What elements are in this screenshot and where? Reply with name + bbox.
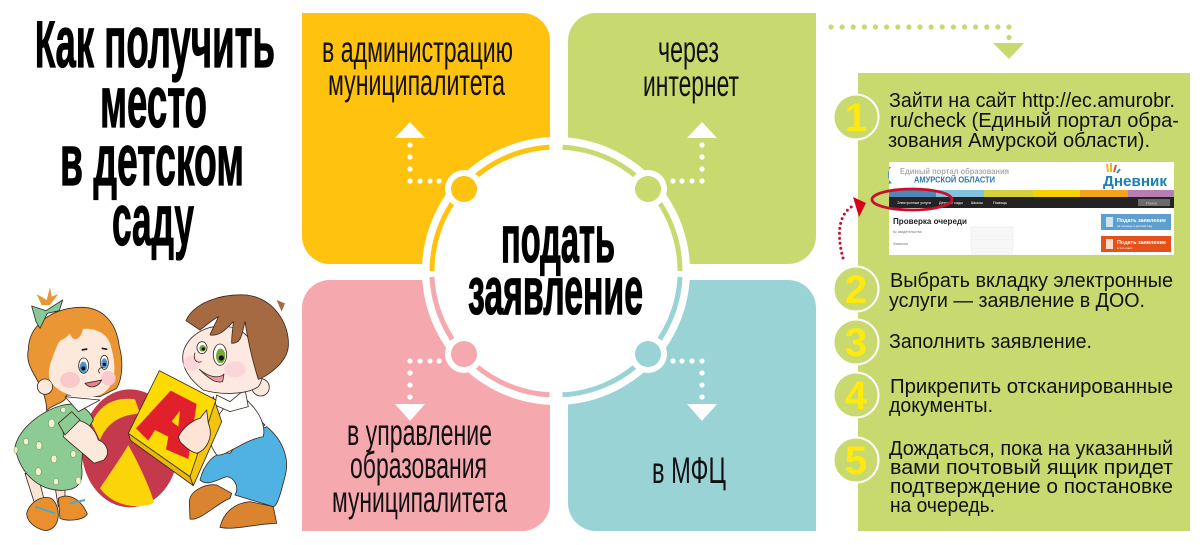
panel label: administration <box>322 29 513 103</box>
website screenshot: Поиск <box>1146 200 1157 206</box>
title: саду <box>112 181 194 261</box>
panel: education office <box>302 280 550 531</box>
red ellipse highlight <box>872 189 952 210</box>
step 2 <box>834 266 1173 312</box>
step 3: Заполнить заявление. <box>889 331 1092 353</box>
panel label: education office: в управление <box>347 412 492 453</box>
panel label: education office <box>332 412 507 520</box>
arrow: to internet <box>670 122 717 184</box>
panel: steps <box>834 73 1190 531</box>
step 1 <box>834 90 1179 152</box>
website screenshot: Дневник <box>1103 173 1167 190</box>
step 3 <box>834 320 1092 365</box>
arrow: dotted connector to steps panel <box>828 24 1024 59</box>
title: место <box>100 63 207 143</box>
panel label: MFC: в МФЦ <box>652 450 726 491</box>
boy <box>183 295 288 528</box>
ball <box>82 389 178 507</box>
step 4: документы. <box>889 395 993 417</box>
step 1: Зайти на сайт http://ec.amurobr. <box>889 90 1175 112</box>
arrow: to education office <box>395 358 442 421</box>
central heading: заявление <box>468 254 643 329</box>
panel label: education office: муниципалитета <box>332 479 507 520</box>
panel label: administration: муниципалитета <box>328 62 505 103</box>
step 5 <box>834 438 1173 517</box>
website screenshot: АМУРСКОЙ ОБЛАСТИ <box>914 176 995 184</box>
step 1: 1 <box>845 96 867 140</box>
website screenshot: Помощь <box>993 201 1007 205</box>
website screenshot: в 1-й класс <box>1117 246 1133 250</box>
central heading <box>468 202 643 329</box>
step 5: Дождаться, пока на указанный <box>889 438 1173 460</box>
arrow: to administration <box>395 122 442 184</box>
website screenshot: № свидетельства <box>893 230 922 234</box>
website screenshot: Школы <box>971 201 984 205</box>
central heading: подать <box>501 202 615 277</box>
step 2: 2 <box>845 268 867 312</box>
panel label: administration: в администрацию <box>322 29 513 70</box>
panel label: internet: интернет <box>643 63 739 104</box>
website screenshot: Подать заявление <box>1117 240 1166 246</box>
panel: internet <box>568 13 816 264</box>
panel label: internet <box>643 29 739 104</box>
girl <box>14 287 122 531</box>
website screenshot: Проверка очереди <box>893 216 967 226</box>
website screenshot: Фамилия <box>893 242 908 246</box>
boy's hand <box>178 410 210 453</box>
panel: administration <box>302 13 550 264</box>
step 5: вами почтовый ящик придет <box>890 457 1173 479</box>
step 5: 5 <box>845 439 867 483</box>
letter block <box>128 371 222 486</box>
website screenshot: Подать заявление <box>1117 218 1166 224</box>
arrow: red dotted pointer <box>839 197 866 258</box>
step 2: Выбрать вкладку электронные <box>890 270 1173 292</box>
website screenshot: на очередь в детский сад <box>1117 224 1152 228</box>
step 4: Прикрепить отсканированные <box>890 376 1173 398</box>
step 5: подтверждение о постановке <box>890 476 1173 498</box>
website screenshot: Единый портал образования <box>900 167 1009 176</box>
website screenshot: Электронные услуги <box>897 201 931 205</box>
step 2: услуги — заявление в ДОО. <box>889 290 1145 312</box>
illustration: children with ball and letter block <box>14 287 288 531</box>
website screenshot: Детские сады <box>939 201 964 205</box>
central circle <box>422 137 690 405</box>
step 4: 4 <box>845 374 868 418</box>
step 1: ru/check (Единый портал обра- <box>890 110 1179 132</box>
panel label: education office: образования <box>350 445 487 486</box>
step 3: 3 <box>845 321 867 365</box>
step 1: зования Амурской области). <box>888 130 1150 152</box>
panel: MFC <box>568 280 816 531</box>
website screenshot <box>888 162 1174 255</box>
step 4 <box>834 372 1173 418</box>
title: в детском <box>60 121 244 201</box>
title <box>35 3 275 261</box>
title: Как получить <box>35 3 275 83</box>
arrow: to MFC <box>670 358 717 421</box>
panel label: internet: через <box>658 29 719 70</box>
step 5: на очередь. <box>890 495 995 517</box>
